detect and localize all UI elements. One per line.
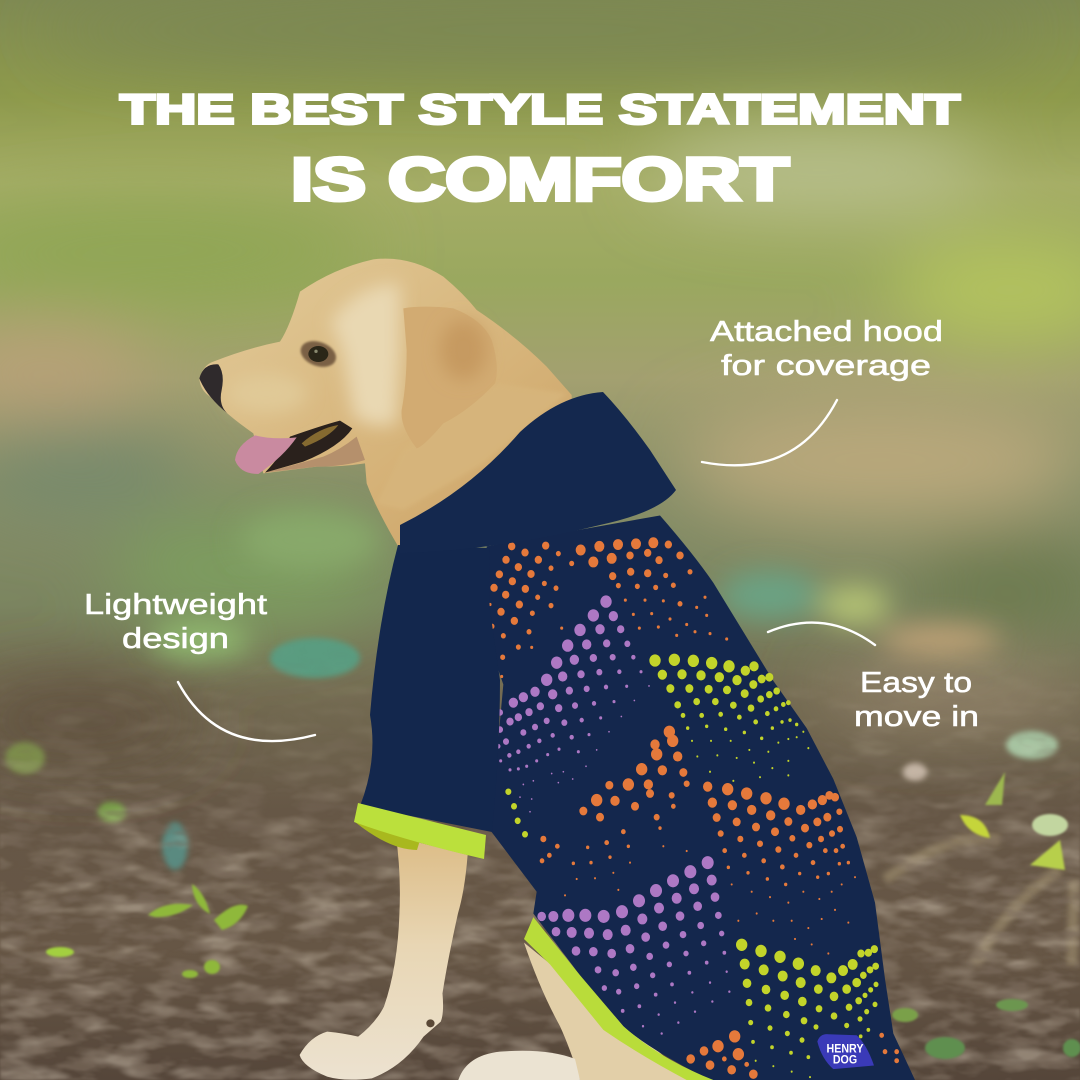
tongue — [235, 435, 297, 474]
callout: lightweight design — [84, 589, 315, 741]
lime dots lower — [742, 945, 876, 1077]
mouth — [265, 421, 352, 473]
dog head and neck — [199, 259, 572, 547]
callout: easy to move in: Easy to — [860, 667, 972, 699]
eye — [297, 336, 340, 372]
neck shading — [377, 383, 567, 510]
orange dots top — [490, 543, 727, 676]
purple dots upper — [498, 602, 649, 812]
hood — [400, 392, 676, 553]
callout: easy to move in: move in — [854, 701, 979, 733]
dog front leg — [300, 837, 468, 1080]
nose — [199, 364, 227, 413]
dog hind leg and paw — [458, 943, 693, 1080]
title line 1: THE BEST STYLE STATEMENT — [120, 86, 960, 132]
dog wearing hoodie — [199, 259, 915, 1080]
lime dots upper — [508, 660, 808, 834]
lime hem — [524, 917, 713, 1080]
callout: attached hood: for coverage — [721, 350, 931, 382]
muzzle highlight — [227, 373, 307, 413]
callout: lightweight design: Lightweight — [84, 589, 267, 621]
teeth and gum — [302, 425, 338, 447]
lower lip — [265, 437, 365, 473]
callout: attached hood: Attached hood — [710, 316, 943, 348]
lime sleeve cuff — [354, 803, 486, 859]
orange dots bottom — [691, 1035, 897, 1074]
callout: easy to move in — [768, 623, 979, 733]
hoodie body with dot print — [487, 515, 915, 1080]
callout: lightweight design: design — [122, 623, 229, 655]
hoodie sleeve — [354, 545, 500, 859]
forest floor texture — [0, 713, 1080, 1080]
ear — [402, 307, 497, 448]
orange dots middle — [542, 732, 855, 953]
purple dots lower — [542, 863, 729, 1033]
leaves and sprouts — [46, 772, 1080, 1059]
ear inner shadow — [440, 320, 487, 380]
brand tag: DOG — [833, 1054, 857, 1066]
brand tag — [817, 1034, 874, 1069]
forehead highlight — [330, 283, 400, 426]
brand tag: HENRY — [827, 1043, 864, 1055]
title — [120, 86, 960, 213]
callout: attached hood — [702, 316, 943, 465]
title line 2: IS COMFORT — [291, 146, 789, 213]
sleeve cuff underside — [355, 815, 420, 850]
